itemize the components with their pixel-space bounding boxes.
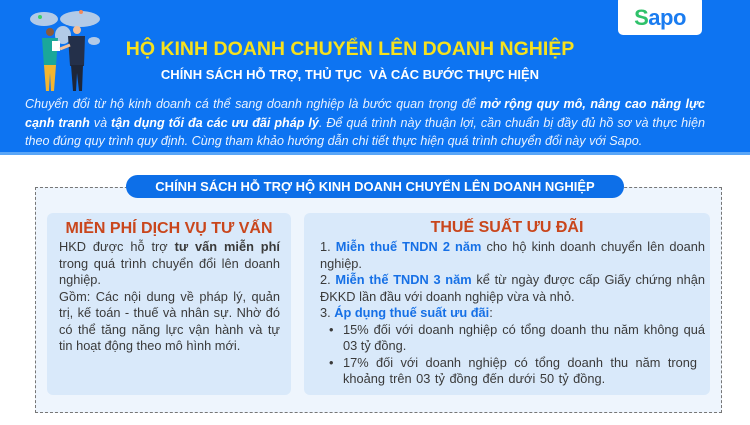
text: tax list: 15% đối với doanh nghiệp có tổng doanh thu năm không quá 03 tỷ đồng.	[343, 322, 705, 353]
logo: Sapo: Sapo	[634, 5, 686, 30]
subtitle: CHÍNH SÁCH HỖ TRỢ, THỦ TỤC VÀ CÁC BƯỚC THỰC HIỆN	[161, 67, 539, 82]
text: tax list: •	[329, 322, 333, 336]
title: HỘ KINH DOANH CHUYỂN LÊN DOANH NGHIỆP	[126, 38, 574, 60]
text: consulting details: Gồm: Các nội dung về pháp lý, quản trị, kế toán - thuế và nhân sự. Nhờ đó có thể tăng năng lực vận hành và tự tin hoạt động theo mô hình mới.	[59, 288, 280, 353]
text: tax list: •	[329, 354, 333, 370]
text: tax list: 3. Áp dụng thuế suất ưu đãi:	[320, 305, 493, 320]
panel: support policies	[35, 187, 722, 413]
heading: free consulting: MIỄN PHÍ DỊCH VỤ TƯ VẤN	[65, 220, 273, 237]
text: tax list	[320, 239, 705, 386]
panel: preferential tax	[304, 213, 710, 395]
logo: Sapo	[618, 0, 702, 35]
section heading pill: CHÍNH SÁCH HỖ TRỢ HỘ KINH DOANH CHUYỂN LÊN DOANH NGHIỆP	[155, 179, 595, 194]
text: consulting details: HKD được hỗ trợ tư vấn miễn phí trong quá trình chuyển đổi lên doanh nghiệp.	[59, 239, 280, 287]
panel: free consulting	[47, 213, 291, 395]
text: tax list: 2. Miễn thế TNDN 3 năm kể từ ngày được cấp Giấy chứng nhận ĐKKD lần đầu với doanh nghiệp vừa và nhỏ.	[320, 272, 705, 304]
text: tax list: 17% đối với doanh nghiệp có tổng doanh thu năm trong khoảng trên 03 tỷ đồng đến dưới 50 tỷ đồng.	[343, 354, 697, 386]
header banner	[0, 0, 750, 155]
heading: preferential tax: THUẾ SUẤT ƯU ĐÃI	[431, 219, 583, 236]
text: tax list: 1. Miễn thuế TNDN 2 năm cho hộ kinh doanh chuyển lên doanh nghiệp.	[320, 239, 705, 270]
text: consulting details	[59, 239, 280, 353]
illustration: businessmen handshake over world map	[30, 10, 100, 91]
section heading pill	[126, 175, 624, 198]
intro paragraph: Chuyển đổi từ hộ kinh doanh cá thể sang doanh nghiệp là bước quan trọng để mở rộng quy mô, nâng cao năng lực cạnh tranh và tận dụng tối đa các ưu đãi pháp lý. Để quá trình này thuận lợi, cần chuẩn bị đầy đủ hồ sơ và thực hiện theo đúng quy trình quy định. Cùng tham khảo hướng dẫn chi tiết thực hiện quá trình chuyển đổi này với Sapo.	[25, 97, 705, 148]
